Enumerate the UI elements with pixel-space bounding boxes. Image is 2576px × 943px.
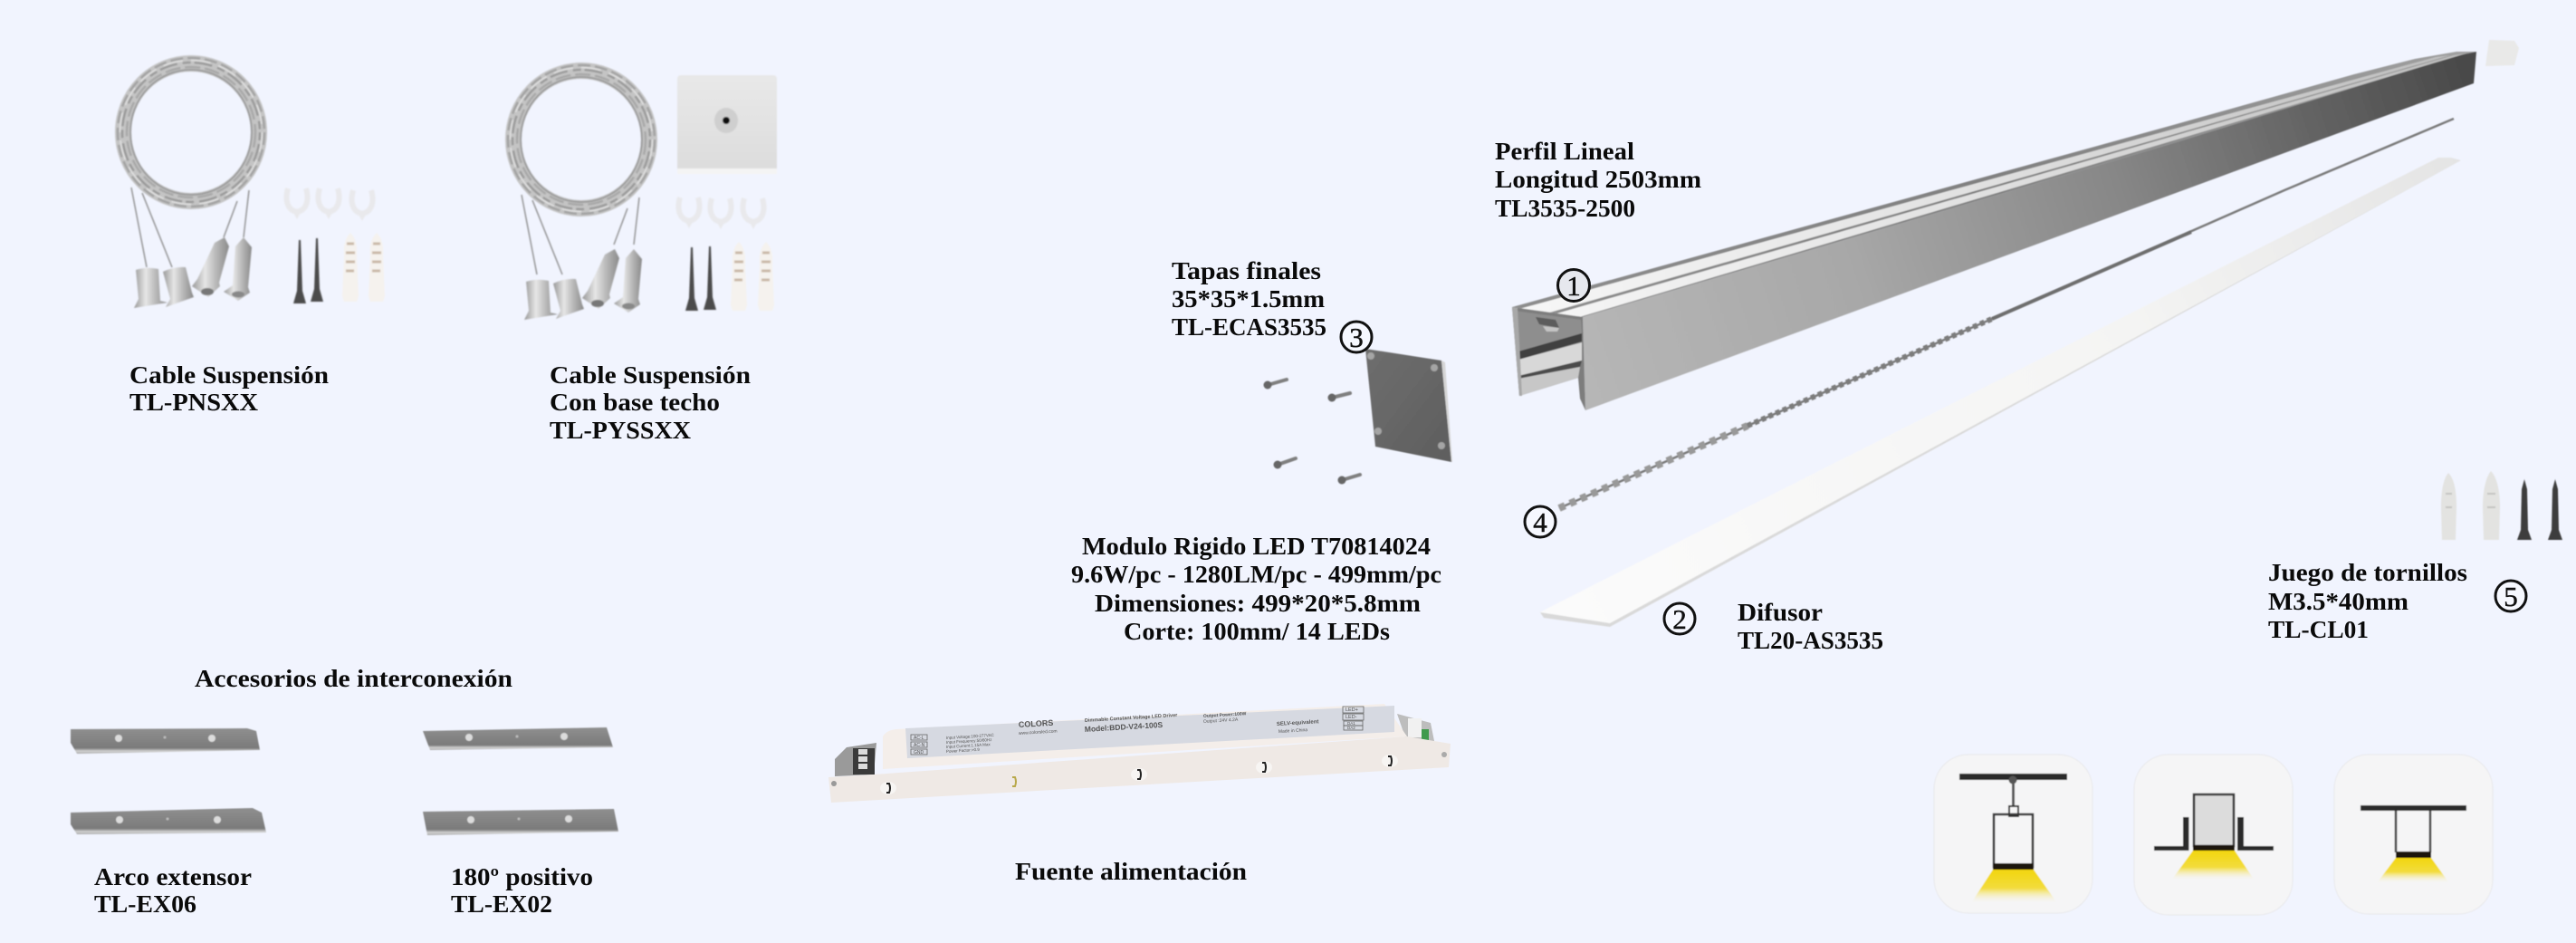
number 2 [1664,603,1695,635]
label: LED module: Corte: 100mm/ 14 LEDs [1124,618,1390,645]
label: 180 positive [451,863,593,918]
product: power supply: Power Factor:>0.9 [946,747,980,754]
product: power supply: www.colorsled.com [1019,728,1058,736]
number 5: 5 [2504,581,2518,612]
label: cable suspension with ceiling base [550,361,751,444]
product: aluminium profile [1512,52,2476,410]
product: cable suspension kit [118,58,385,308]
label: screw set: M3.5*40mm [2268,588,2409,615]
label: linear profile: Perfil Lineal [1495,138,1635,165]
product: power supply [828,704,1451,803]
number 1: 1 [1566,270,1581,302]
label: end caps [1172,257,1326,341]
label: cable suspension: Cable Suspensión [129,361,329,389]
product: power supply: Input Frequency:50/60Hz [946,737,992,745]
label: cable suspension with ceiling base: Con base techo [550,389,720,416]
label: diffuser [1738,599,1883,654]
label: end caps: 35*35*1.5mm [1172,285,1326,313]
connector: 180 positive [423,727,618,835]
label: diffuser: Difusor [1738,599,1823,626]
product: power supply: Output Power:100W [1203,711,1247,719]
product: power supply: Made in China [1278,727,1308,735]
label: cable suspension [129,361,329,416]
product: power supply: SELV-equivalent [1277,719,1319,727]
product: end cap plate and screws [1264,349,1452,484]
label: 180 positive: 180º positivo [451,863,593,890]
label: linear profile: TL3535-2500 [1495,195,1635,222]
icon: surface mounting [2334,755,2493,914]
icon: recessed mounting [2134,755,2293,915]
label: screw set: Juego de tornillos [2268,559,2467,586]
label: arc extender [94,863,252,918]
product: power supply: Dimmable Constant Voltage LED Driver [1085,713,1178,724]
label: LED module: 9.6W/pc - 1280LM/pc - 499mm/pc [1071,561,1441,588]
product: power supply: Input Current:1.15A Max [946,742,991,749]
product: diffuser [1540,158,2461,627]
number 5 [2495,581,2526,612]
product: power supply: Model:BDD-V24-100S [1085,720,1164,734]
label: cable suspension with ceiling base: TL-PYSSXX [550,417,692,444]
product: LED strip [1559,119,2454,508]
label: linear profile: Longitud 2503mm [1495,166,1702,193]
label: screw set [2268,559,2467,643]
product: power supply: LED- [1345,715,1357,720]
number 3: 3 [1349,322,1364,353]
number 3 [1341,322,1372,353]
heading: interconnection accessories: Accesorios de interconexión [195,665,512,692]
product: cable suspension with ceiling base [508,65,777,320]
product: power supply: Output :24V 4.2A [1203,717,1239,725]
product: power supply: DA2 [1347,726,1355,730]
product: power supply: AC-N [914,743,925,748]
label: LED module: Dimensiones: 499*20*5.8mm [1095,590,1422,617]
product: power supply: Input Voltage:100-277VAC [946,733,995,740]
connector: arc extender [71,728,266,834]
number 4: 4 [1533,506,1547,538]
icon: suspended mounting [1934,755,2092,913]
product: power supply: AC-L [914,736,924,741]
label: LED module: Modulo Rigido LED T70814024 [1082,533,1431,560]
label: diffuser: TL20-AS3535 [1738,627,1883,654]
label: arc extender: TL-EX06 [94,890,196,918]
label: screw set: TL-CL01 [2268,616,2369,643]
label: end caps: TL-ECAS3535 [1172,313,1326,341]
label: linear profile [1495,138,1702,222]
product: screw set [2441,471,2562,540]
product: power supply: COLORS [1019,718,1054,729]
product: power supply: LED+ [1345,707,1358,713]
number 1 [1557,270,1590,302]
product: power supply: GND [914,750,924,755]
number 4 [1525,506,1556,538]
label: end caps: Tapas finales [1172,257,1321,284]
number 2: 2 [1672,603,1687,635]
label: power supply: Fuente alimentación [1015,858,1247,885]
label: 180 positive: TL-EX02 [451,890,552,918]
label: cable suspension: TL-PNSXX [129,389,259,416]
product: power supply: DA1 [1347,721,1355,726]
label: cable suspension with ceiling base: Cable Suspensión [550,361,751,389]
label: arc extender: Arco extensor [94,863,252,890]
label: LED module [1071,533,1441,645]
product: end cap piece [2485,40,2519,66]
